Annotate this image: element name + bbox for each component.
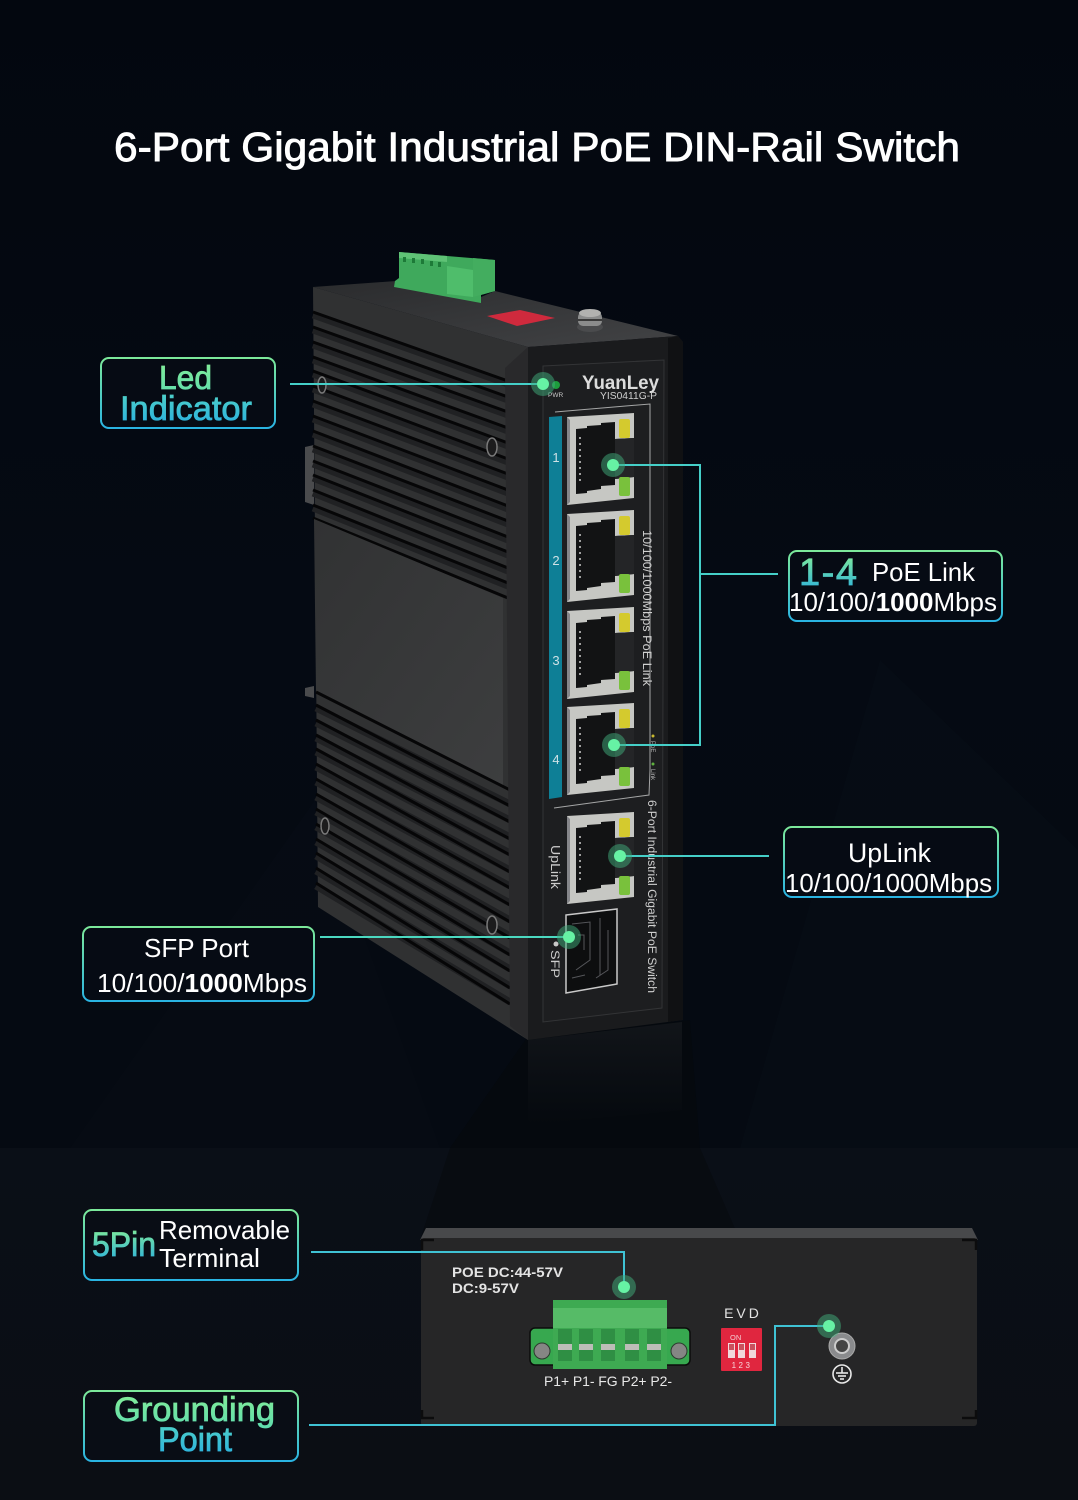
green led <box>552 381 560 389</box>
vertical uplink label: UpLink <box>548 845 563 890</box>
port numbers: 1 <box>552 450 560 465</box>
corner chamfer <box>505 347 528 1040</box>
side face <box>313 287 528 1040</box>
voltage label <box>452 1265 563 1296</box>
vertical poe legend <box>649 734 655 781</box>
dot: grounding <box>817 1314 841 1338</box>
lower cooling fins shadow <box>316 708 510 1002</box>
red dip switch top view <box>487 310 555 326</box>
teal number strip <box>549 416 562 799</box>
grounding screw top view <box>577 309 603 332</box>
sfp port <box>566 909 617 993</box>
front face <box>528 336 683 1040</box>
ethernet port 3 <box>567 607 634 699</box>
label: sfp port: SFP Port <box>144 933 250 963</box>
power led label: PWR <box>548 392 563 399</box>
label: speed: 10/100/1000Mbps <box>789 587 997 617</box>
grounding line <box>309 1326 829 1425</box>
label: 1-4: 1-4 <box>799 552 857 594</box>
vertical speed label: 10/100/1000Mbps PoE Link <box>640 530 652 686</box>
side screws <box>318 377 497 934</box>
vertical poe legend: Link <box>649 769 655 781</box>
top face <box>313 281 678 347</box>
title: 6-Port Gigabit Industrial PoE DIN-Rail Switch <box>114 124 960 170</box>
voltage label: DC:9-57V <box>452 1281 519 1296</box>
port numbers <box>552 450 560 767</box>
label: uplink speed: 10/100/1000Mbps <box>785 868 992 898</box>
right rail <box>668 336 683 1022</box>
label: grounding: Grounding <box>114 1391 275 1429</box>
uplink line <box>620 855 769 857</box>
dot: uplink <box>608 844 632 868</box>
dot: port 4 <box>602 733 626 757</box>
label: sfp speed: 10/100/1000Mbps <box>97 968 307 998</box>
switch device <box>305 252 683 1040</box>
green terminal block <box>530 1300 690 1369</box>
callout lines <box>290 384 829 1425</box>
upper cooling fins grooves <box>313 312 508 598</box>
upper cooling fins shadow <box>313 315 508 586</box>
vertical product label: 6-Port Industrial Gigabit PoE Switch <box>645 800 657 993</box>
middle flat panel <box>314 519 503 786</box>
callout: 5pin terminal <box>84 1210 298 1280</box>
label: uplink: UpLink <box>848 838 931 868</box>
grounding screw <box>829 1333 855 1359</box>
ethernet port 4 <box>567 703 634 795</box>
port numbers: 2 <box>552 553 560 568</box>
port numbers: 3 <box>552 653 560 668</box>
logo: YuanLey <box>582 372 659 394</box>
label: 5pin: 5Pin <box>92 1226 156 1264</box>
label: point: Point <box>158 1421 233 1459</box>
port numbers: 4 <box>552 752 560 767</box>
port group outline <box>554 404 650 808</box>
ethernet port 1 <box>567 413 634 505</box>
front inner panel <box>543 360 664 1022</box>
poe link stem <box>700 573 778 575</box>
background triangles <box>70 660 1078 1240</box>
rear panel corners <box>422 1240 976 1418</box>
din rail clips <box>305 445 314 698</box>
ethernet port 2 <box>567 510 634 602</box>
dot: port 1 <box>601 453 625 477</box>
label: terminal: Terminal <box>159 1243 260 1273</box>
label: indicator: Indicator <box>120 390 252 428</box>
red dip switch <box>721 1328 762 1371</box>
model number: YIS0411G-P <box>600 390 657 402</box>
rear panel body <box>421 1238 977 1426</box>
switch reflection <box>528 1022 682 1125</box>
sfp label <box>548 942 562 978</box>
red dip switch: 123 <box>732 1361 752 1370</box>
sfp label: SFP <box>548 950 562 978</box>
label: led: Led <box>159 359 212 396</box>
callout: sfp port <box>83 927 314 1001</box>
evd label: EVD <box>724 1305 762 1321</box>
vertical poe legend: PoE <box>649 741 655 752</box>
label: poe link: PoE Link <box>872 557 976 587</box>
ground symbol <box>833 1365 851 1383</box>
callout: led indicator <box>101 358 275 428</box>
dot: terminal <box>612 1275 636 1299</box>
poe link bracket <box>613 465 700 745</box>
rear panel <box>420 1228 978 1426</box>
led line <box>290 383 543 385</box>
rear panel top lip <box>420 1228 978 1240</box>
callout: uplink <box>784 827 998 898</box>
dot: sfp <box>557 925 581 949</box>
sfp line <box>320 936 569 938</box>
terminal pin labels: P1+ P1- FG P2+ P2- <box>544 1373 672 1389</box>
lower background band <box>0 1148 1078 1500</box>
callout: grounding point <box>84 1391 298 1461</box>
voltage label: POE DC:44-57V <box>452 1265 563 1280</box>
dot: led <box>531 372 555 396</box>
marker dots <box>531 372 841 1338</box>
label: removable: Removable <box>159 1215 290 1245</box>
red dip switch: ON <box>730 1333 741 1342</box>
green terminal top view <box>394 252 495 303</box>
lower cooling fins grooves <box>316 692 510 1004</box>
uplink port <box>567 812 634 904</box>
terminal line <box>311 1252 624 1287</box>
callout: poe link <box>789 551 1002 621</box>
